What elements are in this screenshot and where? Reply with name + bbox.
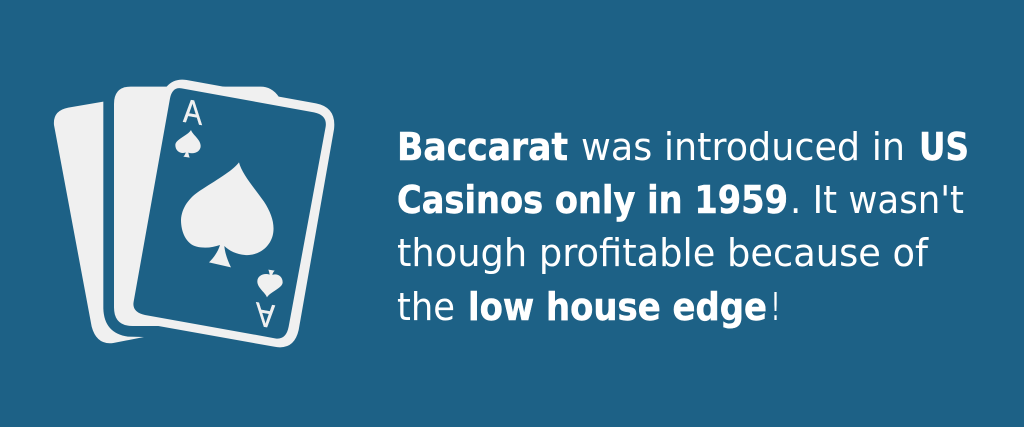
- bottom corner: inverted letter A and small spade: [256, 270, 283, 336]
- top corner: letter A and small spade: [175, 92, 202, 158]
- front card face: [133, 88, 326, 339]
- inverted letter A: A: [256, 295, 275, 336]
- line 4: low house edge: [468, 285, 767, 329]
- back card: [54, 102, 144, 343]
- small spade: [175, 130, 201, 158]
- middle card: [114, 87, 279, 326]
- line 4: the: [397, 285, 455, 329]
- line 1: was introduced in: [581, 125, 905, 169]
- letter A: A: [183, 92, 202, 133]
- line 4: !: [771, 285, 780, 329]
- line 1: [397, 125, 969, 169]
- line 1: US: [919, 125, 969, 169]
- front card border: [130, 80, 334, 347]
- line 2: Casinos only in 1959: [397, 178, 788, 222]
- icon: fanned playing cards: [54, 80, 334, 347]
- large spade: [181, 162, 274, 267]
- text block: baccarat fact: [397, 125, 969, 329]
- line 1: Baccarat: [397, 125, 568, 169]
- inverted small spade: [257, 270, 283, 297]
- line 2: . It wasn't: [790, 178, 964, 222]
- line 3: though profitable because of: [397, 231, 930, 275]
